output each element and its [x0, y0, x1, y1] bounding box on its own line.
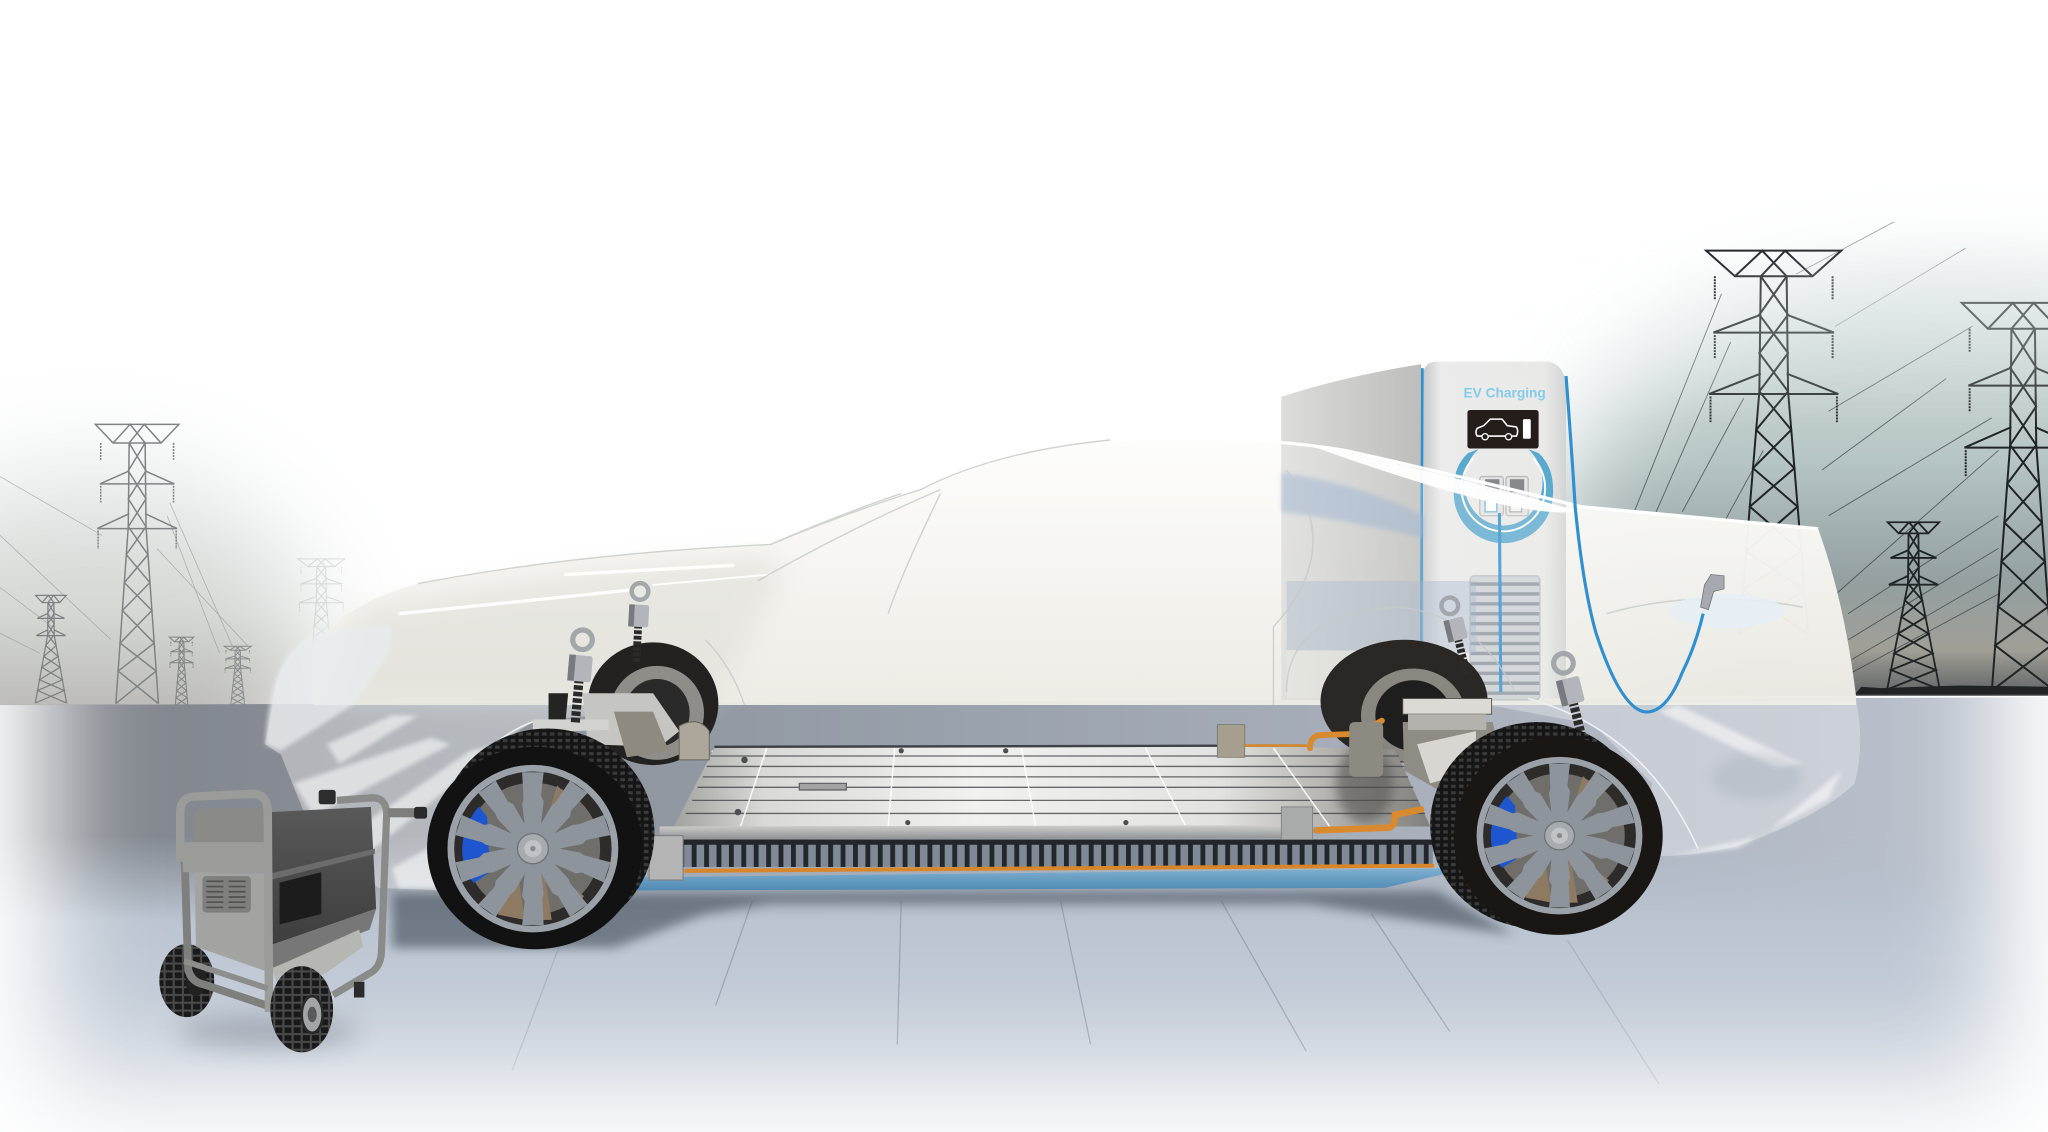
- generator: contact shadow: [176, 1016, 359, 1047]
- battery: bracket lower: [1281, 807, 1313, 840]
- front motor assembly: [533, 693, 709, 760]
- battery: bolt mount centre: [799, 783, 846, 790]
- station: blue trim left: [1421, 368, 1422, 700]
- power lines: right: [1633, 222, 1998, 672]
- battery: cell seams: [686, 756, 1425, 813]
- generator: light side band: [183, 842, 270, 873]
- battery: bracket upper: [1217, 725, 1245, 757]
- pylon: faded behind car: [298, 559, 345, 676]
- front wheel: rim: [451, 768, 615, 929]
- icon: battery: [1523, 419, 1531, 439]
- car body: translucent shell: [265, 362, 1860, 890]
- treeline: right horizon: [1855, 685, 2048, 695]
- front wheel: tread: [440, 729, 654, 937]
- suspension shocks: rear: [1438, 595, 1595, 747]
- car: glass reflection on station: [1281, 473, 1424, 538]
- car: front glass fascia: [265, 614, 747, 890]
- station: short charging cable: [1499, 513, 1501, 692]
- car: outline strokes: [418, 440, 1802, 705]
- station: charging ring: [1454, 449, 1553, 543]
- car: station seen through glass: [1281, 362, 1566, 700]
- battery: top plate: [674, 747, 1430, 826]
- ground: darker upper band: [0, 697, 2048, 910]
- pylon: far right: [1962, 303, 2048, 691]
- battery: dark reflection: [1336, 744, 1394, 823]
- pylon: left large: [95, 424, 179, 704]
- suspension shocks: front: [564, 583, 650, 724]
- car: upper cabin and hood: [308, 438, 1856, 705]
- station: side panel: [1281, 364, 1426, 700]
- car: reflection behind plug: [1669, 594, 1784, 628]
- generator: exhaust panel: [280, 872, 321, 924]
- haze over pylon tops: [1674, 250, 2048, 420]
- battery: module stack: [682, 840, 1433, 867]
- pylon: right foreground large: [1706, 251, 1841, 635]
- battery: top edge rail: [714, 746, 1306, 747]
- car: hood shading: [340, 555, 784, 705]
- generator: rear frame: [184, 842, 266, 1005]
- car: hood streaks: [400, 565, 771, 614]
- station: front panel: [1424, 362, 1566, 699]
- ground shadow under platform: [392, 890, 1515, 948]
- rear wheel: rim: [1480, 760, 1639, 911]
- pylon: left distant: [169, 637, 194, 706]
- battery: side rail: [660, 825, 1306, 840]
- rear-axle back wheel: [1320, 640, 1488, 763]
- station: display screen: [1467, 410, 1539, 448]
- battery: front end block: [649, 836, 683, 880]
- station: label: EV Charging: [1464, 386, 1546, 401]
- front wheel: tire: [427, 747, 643, 949]
- car: blue tint lower station: [1287, 581, 1476, 653]
- power lines: left: [0, 477, 248, 653]
- rear wheel: [1430, 722, 1663, 935]
- station: connector sockets: [1480, 477, 1528, 516]
- front-axle back wheel: [588, 642, 718, 765]
- rear motor assembly: [1349, 699, 1502, 796]
- pylon: left small: [35, 595, 67, 703]
- generator: output plug: [388, 807, 427, 819]
- battery: orange busbar: [684, 866, 1434, 871]
- generator: front wheel: [270, 966, 333, 1052]
- battery: blue tray: [636, 868, 1452, 890]
- generator: vent: [202, 876, 251, 913]
- generator: engine base: [272, 930, 363, 992]
- battery pack: [636, 721, 1452, 890]
- charging station: [1281, 362, 1566, 700]
- floor seams: [512, 901, 1659, 1084]
- ground plane: [0, 697, 2048, 1132]
- rear wheel: tread: [1430, 722, 1644, 928]
- pylon: left farthest: [224, 646, 251, 705]
- long charging cable: [1566, 376, 1724, 712]
- car: cream lower door band: [1287, 650, 1424, 699]
- generator: rear wheel: [159, 944, 214, 1017]
- generator: lower side panel: [195, 872, 270, 973]
- generator: dark body: [270, 807, 376, 945]
- car: roof highlight: [1110, 438, 1818, 529]
- generator: front frame: [180, 794, 269, 1012]
- generator: right frame: [333, 798, 387, 995]
- generator: [159, 790, 427, 1052]
- rear wheel: tire: [1454, 736, 1663, 935]
- battery: orange coolant hoses: [1246, 721, 1421, 830]
- icon: car with plug: [1476, 419, 1518, 436]
- sky: left horizon haze: [0, 440, 347, 705]
- cable: plug head: [1701, 574, 1724, 610]
- generator: foot: [354, 982, 364, 998]
- station: ventilation grille: [1470, 576, 1540, 700]
- battery: bolts: [735, 748, 1128, 825]
- car: rear glass fascia: [1489, 699, 1860, 856]
- generator: bottom block: [270, 909, 376, 969]
- front wheel: [427, 729, 654, 949]
- sky: right horizon haze: [1566, 249, 2048, 696]
- pylon: right small: [1887, 522, 1940, 690]
- generator: fuel cap: [319, 790, 336, 804]
- generator: fuel tank: [193, 808, 274, 842]
